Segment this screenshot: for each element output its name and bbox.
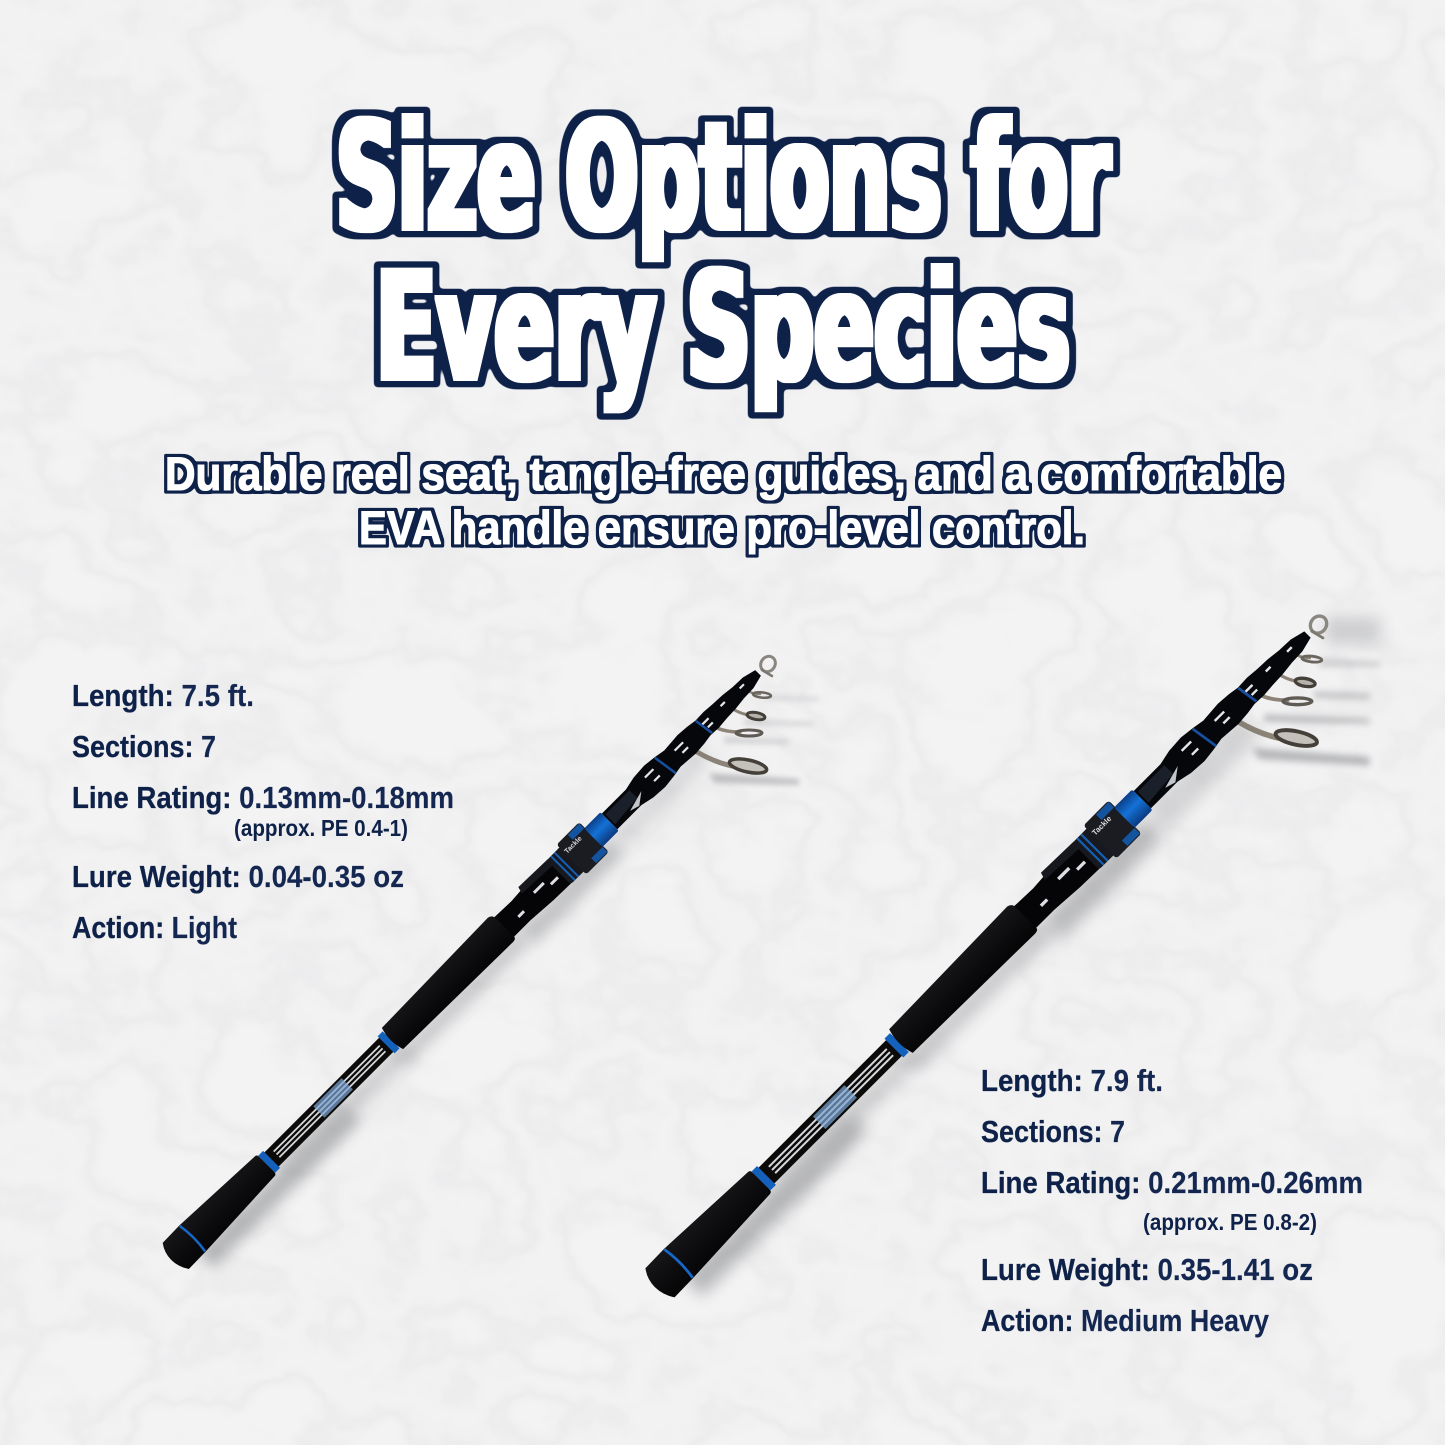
reel seat nut	[544, 822, 609, 887]
spec: line rating: Line Rating: 0.13mm-0.18mm	[72, 780, 454, 815]
front grip	[378, 914, 516, 1052]
front grip	[885, 903, 1039, 1056]
spec: action: Action: Light	[72, 910, 237, 945]
rod: 7.9 ft	[638, 613, 1381, 1317]
guide shadows	[1253, 617, 1381, 766]
spec: action: Action: Medium Heavy	[981, 1303, 1270, 1338]
blue collar	[584, 812, 619, 847]
rear grip	[640, 1166, 776, 1302]
spec list: 7.9 ft rod	[981, 1063, 1363, 1338]
rod shadow	[194, 746, 716, 1268]
spec: line rating note: (approx. PE 0.8-2)	[1143, 1209, 1317, 1235]
spec: sections: Sections: 7	[72, 729, 216, 764]
rear grip	[158, 1151, 280, 1273]
title	[336, 91, 1110, 415]
blue collar	[1114, 789, 1153, 828]
blank between grips	[258, 1031, 400, 1173]
spec: length: Length: 7.5 ft.	[72, 678, 254, 713]
telescoping sections	[599, 662, 769, 832]
guides	[697, 653, 778, 776]
subtitle	[165, 447, 1282, 554]
spec: length: Length: 7.9 ft.	[981, 1063, 1163, 1098]
guides	[1240, 613, 1330, 749]
spec: lure weight: Lure Weight: 0.04-0.35 oz	[72, 859, 404, 894]
rod body	[638, 618, 1337, 1317]
reel seat	[1006, 828, 1113, 936]
reel seat	[487, 847, 583, 944]
rod: 7.5 ft	[156, 653, 819, 1285]
subtitle: EVA handle ensure pro-level control.	[359, 501, 1085, 554]
telescoping sections	[1131, 623, 1319, 811]
reel seat nut: Tackle	[564, 835, 584, 855]
reel seat nut	[1069, 800, 1142, 873]
spec: sections: Sections: 7	[981, 1114, 1125, 1149]
spec: lure weight: Lure Weight: 0.35-1.41 oz	[981, 1252, 1313, 1287]
spec: line rating: Line Rating: 0.21mm-0.26mm	[981, 1165, 1363, 1200]
rod body	[156, 658, 784, 1285]
subtitle: Durable reel seat, tangle-free guides, and a comfortable	[165, 447, 1282, 500]
spec list: 7.5 ft rod	[72, 678, 454, 945]
rod shadow	[680, 716, 1262, 1298]
blank between grips	[752, 1033, 909, 1190]
guide shadows	[709, 695, 819, 785]
spec: line rating note: (approx. PE 0.4-1)	[234, 815, 408, 841]
reel seat nut: Tackle	[1090, 814, 1114, 837]
